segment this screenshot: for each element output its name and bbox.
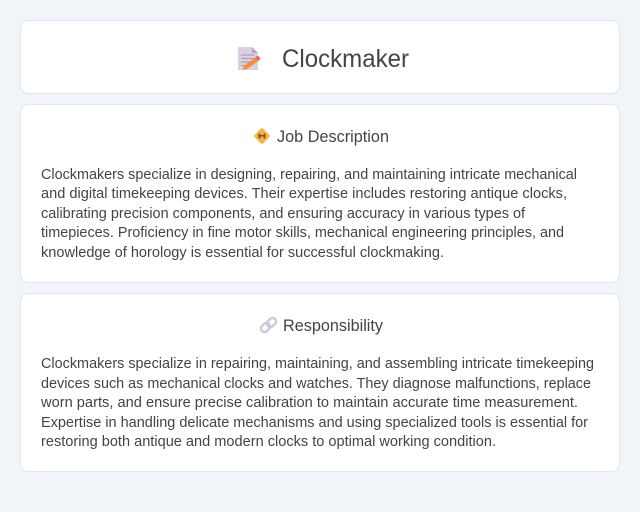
responsibility paragraph [40,356,594,450]
job description paragraph [41,167,577,261]
job description paragraph: calibrating precision components, and ensuring accuracy in various types of [41,206,526,222]
responsibility paragraph: restoring both antique and modern clocks to optimal working condition. [41,434,496,450]
panel: responsibility [20,294,620,472]
job description paragraph: and digital timekeeping devices. Their expertise includes restoring antique clocks, [41,186,567,202]
responsibility paragraph: Clockmakers specialize in repairing, maintaining, and assembling intricate timekeeping [41,356,594,372]
icon: chain link [259,316,278,334]
heading: job description: Job Description [277,127,389,146]
icon: orange diamond sign [254,128,270,144]
job description paragraph: knowledge of horology is essential for successful clockmaking. [41,245,444,261]
panel: job description [20,104,620,282]
responsibility paragraph: worn parts, and ensure precise calibration to maintain accurate time measurement. [40,395,578,411]
job description paragraph: Clockmakers specialize in designing, repairing, and maintaining intricate mechanical [41,167,577,183]
job description paragraph: timepieces. Proficiency in fine motor skills, mechanical engineering principles, and [41,225,564,241]
title text: Clockmaker [282,46,409,73]
panel: title [20,20,620,94]
heading: responsibility: Responsibility [283,316,384,335]
responsibility paragraph: Expertise in handling delicate mechanisms and using specialized tools is essential for [41,415,588,431]
responsibility paragraph: devices such as mechanical clocks and watches. They diagnose malfunctions, replace [41,376,591,392]
icon: document with pencil [238,47,260,70]
